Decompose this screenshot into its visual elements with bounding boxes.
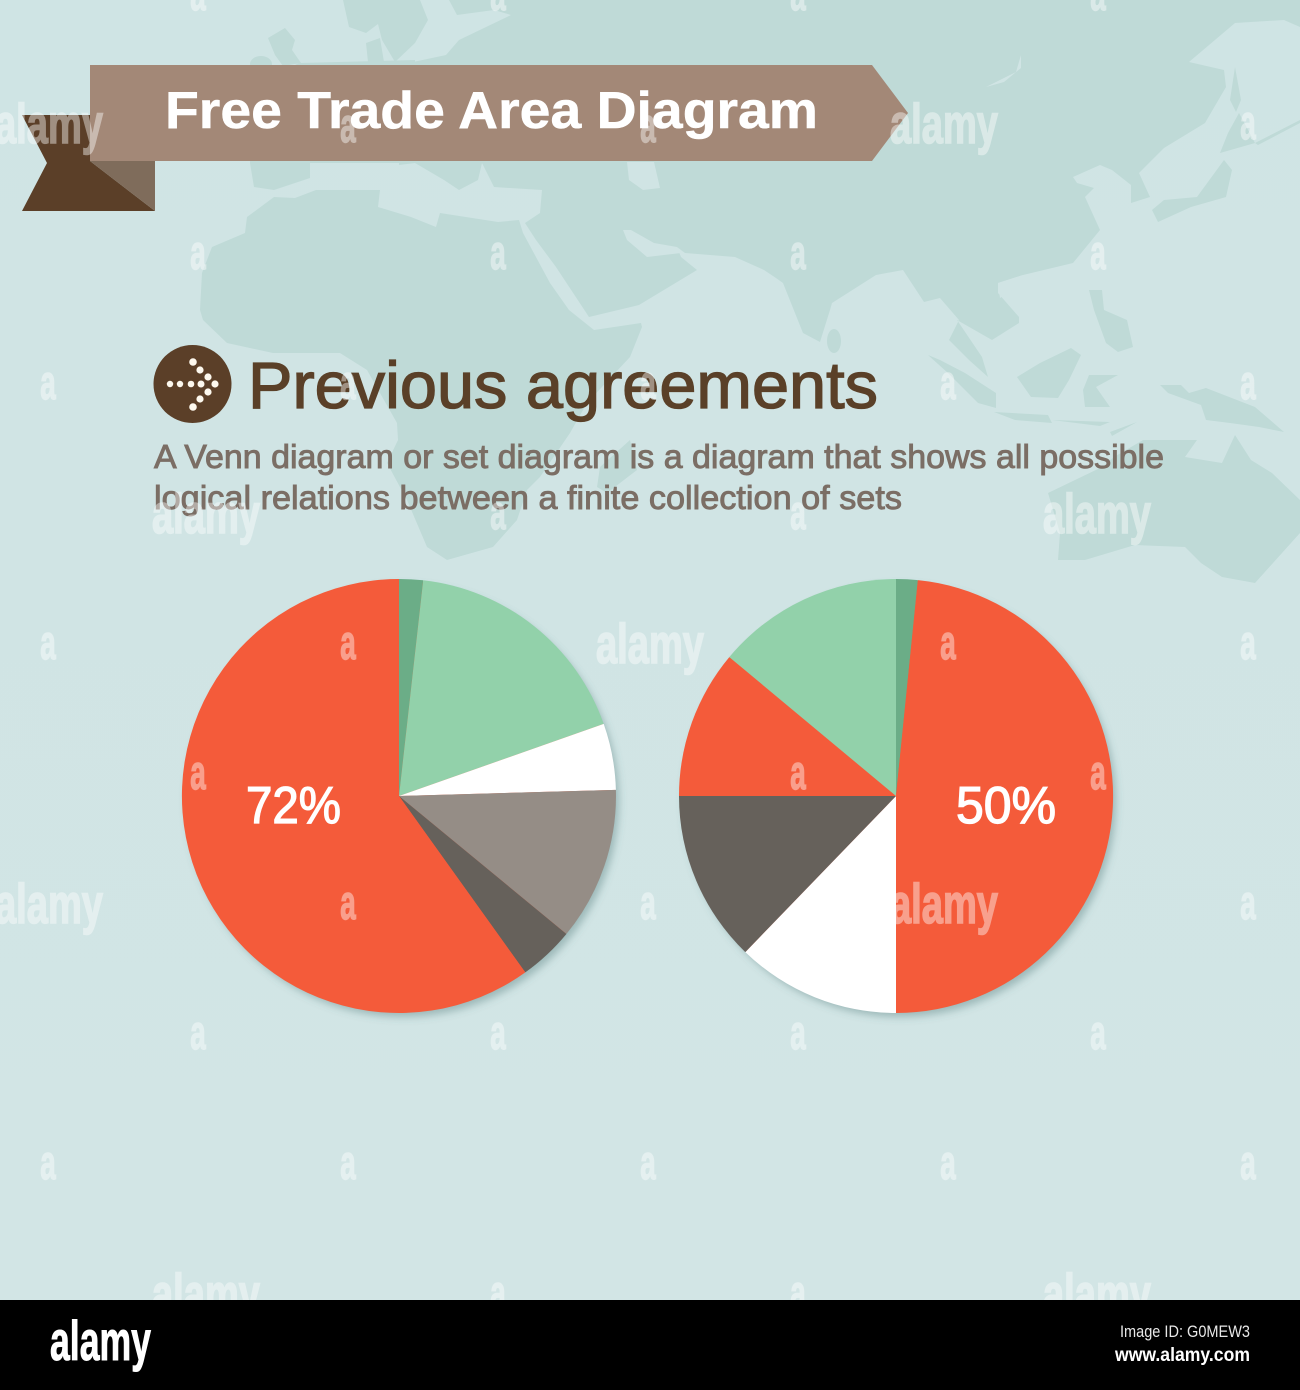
watermark: small marks: a — [790, 486, 807, 540]
watermark: small marks: a — [640, 1136, 657, 1190]
map: Sumatra — [928, 355, 996, 408]
pie chart: 50% — [679, 579, 1113, 1013]
map: Borneo — [1017, 348, 1081, 398]
footer bar — [0, 1300, 1300, 1390]
map: Australia — [1048, 435, 1300, 583]
map: Sakhalin — [1230, 67, 1241, 112]
watermark: large: alamy — [1043, 1262, 1151, 1325]
watermark: small marks: a — [340, 616, 357, 670]
label: 50%: 50% — [956, 777, 1056, 835]
watermark: small marks: a — [790, 1266, 807, 1320]
watermark: small marks: a — [940, 616, 957, 670]
watermark: small marks: a — [340, 876, 357, 930]
world map — [200, 0, 1300, 583]
watermark: small marks: a — [1090, 746, 1107, 800]
watermark: small marks: a — [940, 356, 957, 410]
icon: dotted arrow — [154, 345, 232, 423]
watermark: small marks: a — [790, 746, 807, 800]
map: Madagascar — [597, 440, 637, 493]
watermark: small marks: a — [640, 356, 657, 410]
watermark: small marks: a — [340, 99, 357, 153]
map: Persian Gulf — [623, 230, 681, 257]
description text: A Venn diagram or set diagram is a diagram that shows all possible — [154, 438, 1164, 475]
title: Free Trade Area Diagram — [165, 82, 818, 140]
watermark: small marks: a — [40, 1136, 57, 1190]
watermark: small marks: a — [490, 226, 507, 280]
map: Java and Sunda islands — [994, 412, 1137, 436]
footer logo: alamy — [50, 1309, 151, 1372]
watermark: small marks: a — [940, 1136, 957, 1190]
watermark: large: alamy — [152, 1262, 260, 1325]
watermark: small marks: a — [190, 746, 207, 800]
watermark: large: alamy — [1043, 482, 1151, 545]
map: Western Europe — [250, 60, 415, 190]
watermark: small marks: a — [490, 746, 507, 800]
description text: logical relations between a finite collection of sets — [154, 479, 902, 516]
watermark: small marks: a — [640, 99, 657, 153]
heading: previous agreements: Previous agreements — [248, 348, 878, 422]
map: Caspian Sea — [627, 162, 660, 190]
title banner — [90, 65, 908, 161]
watermark: small marks: a — [1240, 1136, 1257, 1190]
watermark: small marks: a — [490, 486, 507, 540]
watermark: small marks: a — [1090, 226, 1107, 280]
map: Eurasia — [399, 0, 1300, 377]
watermark: small marks: a — [190, 1006, 207, 1060]
map: Ireland — [250, 56, 272, 72]
watermark: large — [0, 92, 1151, 1325]
watermark: small marks: a — [1090, 1006, 1107, 1060]
watermark: small marks: a — [790, 226, 807, 280]
map: Africa — [200, 190, 642, 560]
watermark: small marks: a — [790, 1006, 807, 1060]
watermark: large: alamy — [890, 872, 998, 935]
description text — [154, 438, 1164, 516]
watermark: small marks: a — [490, 1006, 507, 1060]
map: seas and lakes — [623, 55, 1023, 298]
watermark: large: alamy — [890, 92, 998, 155]
watermark: small marks: a — [1240, 876, 1257, 930]
watermark: small marks: a — [1240, 356, 1257, 410]
map: Kuril islands — [1255, 120, 1300, 145]
map: Japan — [1152, 160, 1232, 222]
watermark: large: alamy — [596, 612, 704, 675]
map: Philippines — [1089, 290, 1133, 352]
watermark: small marks: a — [640, 876, 657, 930]
label: 72%: 72% — [246, 777, 341, 835]
footer image id: Image ID: G0MEW3 — [1120, 1322, 1250, 1341]
watermark: small marks: a — [190, 226, 207, 280]
map: Hokkaido — [1220, 113, 1255, 153]
watermark: small marks: a — [40, 356, 57, 410]
footer url: www.alamy.com — [1114, 1345, 1250, 1366]
map: Gulf of Tonkin — [998, 275, 1023, 298]
watermark: small marks: a — [1240, 96, 1257, 150]
map: New Guinea — [1160, 385, 1284, 432]
pie chart: 72% — [182, 579, 616, 1013]
watermark: large: alamy — [152, 482, 260, 545]
watermark: small marks: a — [40, 616, 57, 670]
map: Sri Lanka — [827, 329, 841, 353]
watermark: small marks: a — [490, 1266, 507, 1320]
map: Sulawesi — [1083, 375, 1118, 407]
watermark: small marks: a — [1240, 616, 1257, 670]
map: Britain — [268, 28, 301, 66]
watermark: small marks: a — [340, 356, 357, 410]
map: Scandinavia — [343, 0, 428, 62]
ribbon tail — [22, 115, 155, 211]
map: Denmark — [366, 38, 384, 62]
map: Lake Baikal — [986, 55, 1021, 87]
watermark: small marks: a — [340, 1136, 357, 1190]
